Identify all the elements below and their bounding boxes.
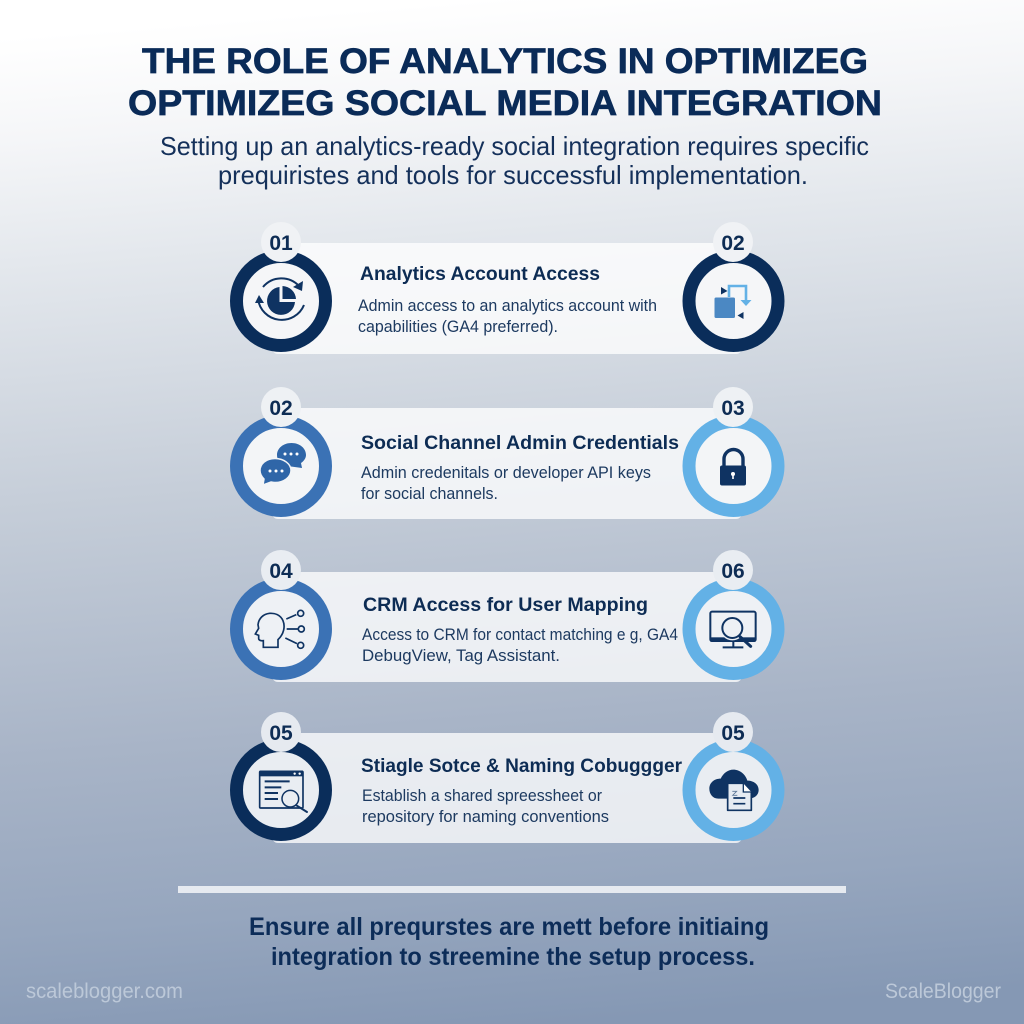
description: naming conventions: Establish a shared spreessheet or [362,786,602,805]
description: social channel credentials: for social channels. [361,484,498,503]
description: social channel credentials: Admin credenitals or developer API keys [361,463,651,482]
icon ring: padlock [689,422,778,510]
description: CRM access: Access to CRM for contact matching e g, GA4 [362,625,678,644]
badge: 04 [261,550,301,590]
icon ring: browser window with magnifier [236,746,326,834]
title [128,42,882,123]
icon ring: clock pie chart [236,256,326,346]
badge: 05 [713,712,753,752]
description: CRM access [362,625,678,665]
description: analytics account access: capabilities (GA4 preferred). [358,317,558,336]
description: naming conventions [362,786,609,826]
icon ring: head with nodes [236,584,326,674]
badge: 02 [261,387,301,427]
description: CRM access: DebugView, Tag Assistant. [362,646,560,665]
heading: analytics account access: Analytics Account Access [360,263,600,285]
description: analytics account access: Admin access to an analytics account with [358,296,657,315]
icon ring: cloud document [689,746,778,834]
badge: 05 [261,712,301,752]
badge: 03: 03 [721,397,745,420]
badge: 05: 05 [721,722,745,745]
watermark: left: scaleblogger.com [26,980,183,1003]
closing statement: Ensure all prequrstes are mett before initiaing [249,913,769,941]
description: social channel credentials [361,463,651,503]
heading: CRM access: CRM Access for User Mapping [363,594,648,616]
description: analytics account access [358,296,657,336]
title: OPTIMIZEG SOCIAL MEDIA INTEGRATION [128,84,882,123]
heading: social channel admin credentials: Social Channel Admin Credentials [361,432,679,454]
panel: analytics account access [236,222,778,354]
subtitle [160,131,869,190]
description: naming conventions: repository for naming conventions [362,807,609,826]
badge: 01 [261,222,301,262]
icon ring: chat bubbles [236,422,326,510]
panel: social channel admin credentials [236,387,778,519]
panel: CRM access for user mapping [236,550,778,682]
subtitle: Setting up an analytics-ready social integration requires specific [160,131,869,161]
badge: 06: 06 [721,560,745,583]
panel: naming conventions [236,712,778,843]
icon ring: monitor with magnifier [689,584,778,674]
icon ring: data transfer squares [689,256,778,346]
closing statement [249,913,769,971]
heading: naming conventions: Stiagle Sotce & Naming Cobuggger [361,755,682,777]
badge: 02: 02 [269,397,293,420]
badge: 02 [713,222,753,262]
badge: 03 [713,387,753,427]
badge: 01: 01 [269,232,293,255]
subtitle: prequiristes and tools for successful implementation. [218,160,808,190]
title: THE ROLE OF ANALYTICS IN OPTIMIZEG [142,42,868,81]
badge: 02: 02 [721,232,745,255]
closing statement: integration to streemine the setup process. [271,943,755,971]
watermark: right: ScaleBlogger [885,980,1001,1003]
badge: 05: 05 [269,722,293,745]
badge: 06 [713,550,753,590]
badge: 04: 04 [269,560,293,583]
